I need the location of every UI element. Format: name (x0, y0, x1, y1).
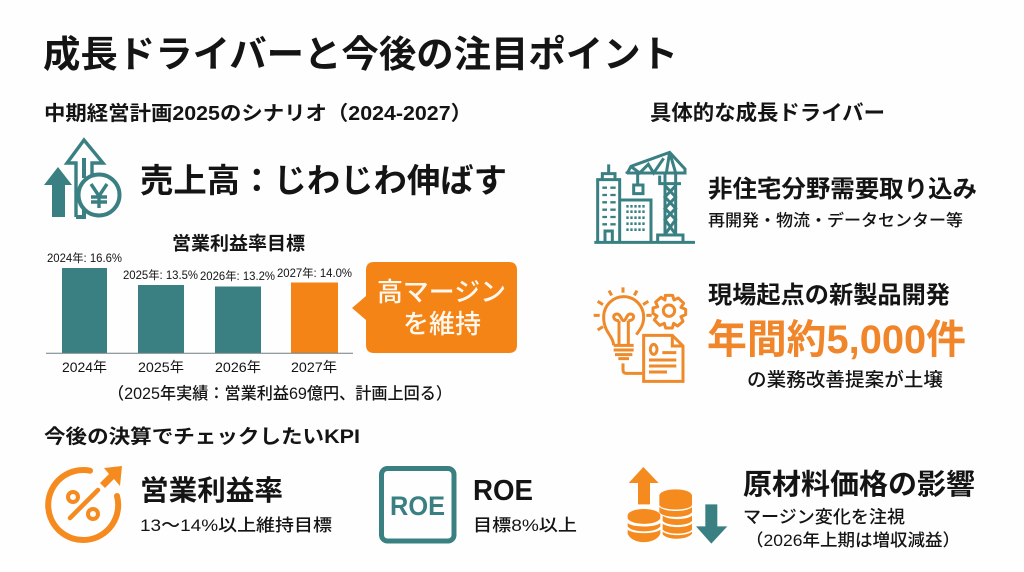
bar 2027 (291, 282, 338, 353)
bar 2026 (215, 286, 261, 353)
axis labels: 2024年 (62, 359, 107, 375)
callout: keep high margin: 高マージン (377, 277, 506, 307)
axis labels: 2025年 (138, 359, 184, 375)
callout: keep high margin: を維持 (403, 309, 481, 339)
heading: growth drivers: 具体的な成長ドライバー (650, 101, 885, 125)
driver 2 figure: 年間約5,000件 (707, 318, 966, 362)
icon: rising arrows with yen coin (44, 140, 120, 217)
heading: mid-term plan scenario: 中期経営計画2025のシナリオ（2024-2027） (44, 102, 472, 125)
axis labels: 2026年 (215, 359, 261, 375)
title: 成長ドライバーと今後の注目ポイント (43, 34, 678, 75)
bar 2024 (62, 268, 107, 353)
axis labels: 2027年 (291, 359, 337, 375)
callout: keep high margin (352, 262, 517, 353)
KPI 1 detail: 13〜14%以上維持目標 (140, 516, 332, 535)
driver 1 detail: 再開発・物流・データセンター等 (708, 210, 963, 230)
bar chart: operating margin target (46, 233, 353, 375)
icon: coins and arrows (628, 467, 727, 544)
driver 2 heading: 現場起点の新製品開発 (708, 282, 950, 309)
heading: KPIs to check: 今後の決算でチェックしたいKPI (44, 425, 360, 448)
value labels: 2024年: 16.6% (47, 251, 122, 265)
driver 2 detail: の業務改善提案が土壌 (747, 369, 943, 391)
KPI 2 detail: 目標8%以上 (473, 516, 577, 535)
chart title: 営業利益率目標 (172, 233, 305, 254)
cost factor heading: 原材料価格の影響 (743, 469, 975, 501)
icon: ROE box: ROE (390, 491, 445, 521)
value labels: 2027年: 14.0% (277, 266, 352, 280)
icon: light bulb, gear and document (594, 287, 686, 381)
driver 1 heading: 非住宅分野需要取り込み (708, 176, 977, 203)
value labels: 2025年: 13.5% (123, 268, 198, 282)
KPI 1 heading: 営業利益率 (140, 475, 283, 506)
icon: ROE box (382, 468, 454, 541)
note: FY2025 result: （2025年実績：営業利益69億円、計画上回る） (108, 384, 452, 403)
bar 2025 (138, 285, 184, 353)
cost factor detail: （2026年上期は増収減益） (746, 531, 960, 550)
icon: building and crane (594, 152, 695, 242)
revenue headline: 売上高：じわじわ伸ばす (140, 162, 507, 199)
value labels: 2026年: 13.2% (200, 269, 275, 283)
value labels (47, 251, 352, 283)
icon: percent with circular arrow (48, 466, 122, 540)
KPI 2 heading: ROE (473, 475, 533, 507)
cost factor detail (743, 507, 960, 550)
cost factor detail: マージン変化を注視 (743, 507, 906, 527)
axis labels (62, 359, 337, 375)
